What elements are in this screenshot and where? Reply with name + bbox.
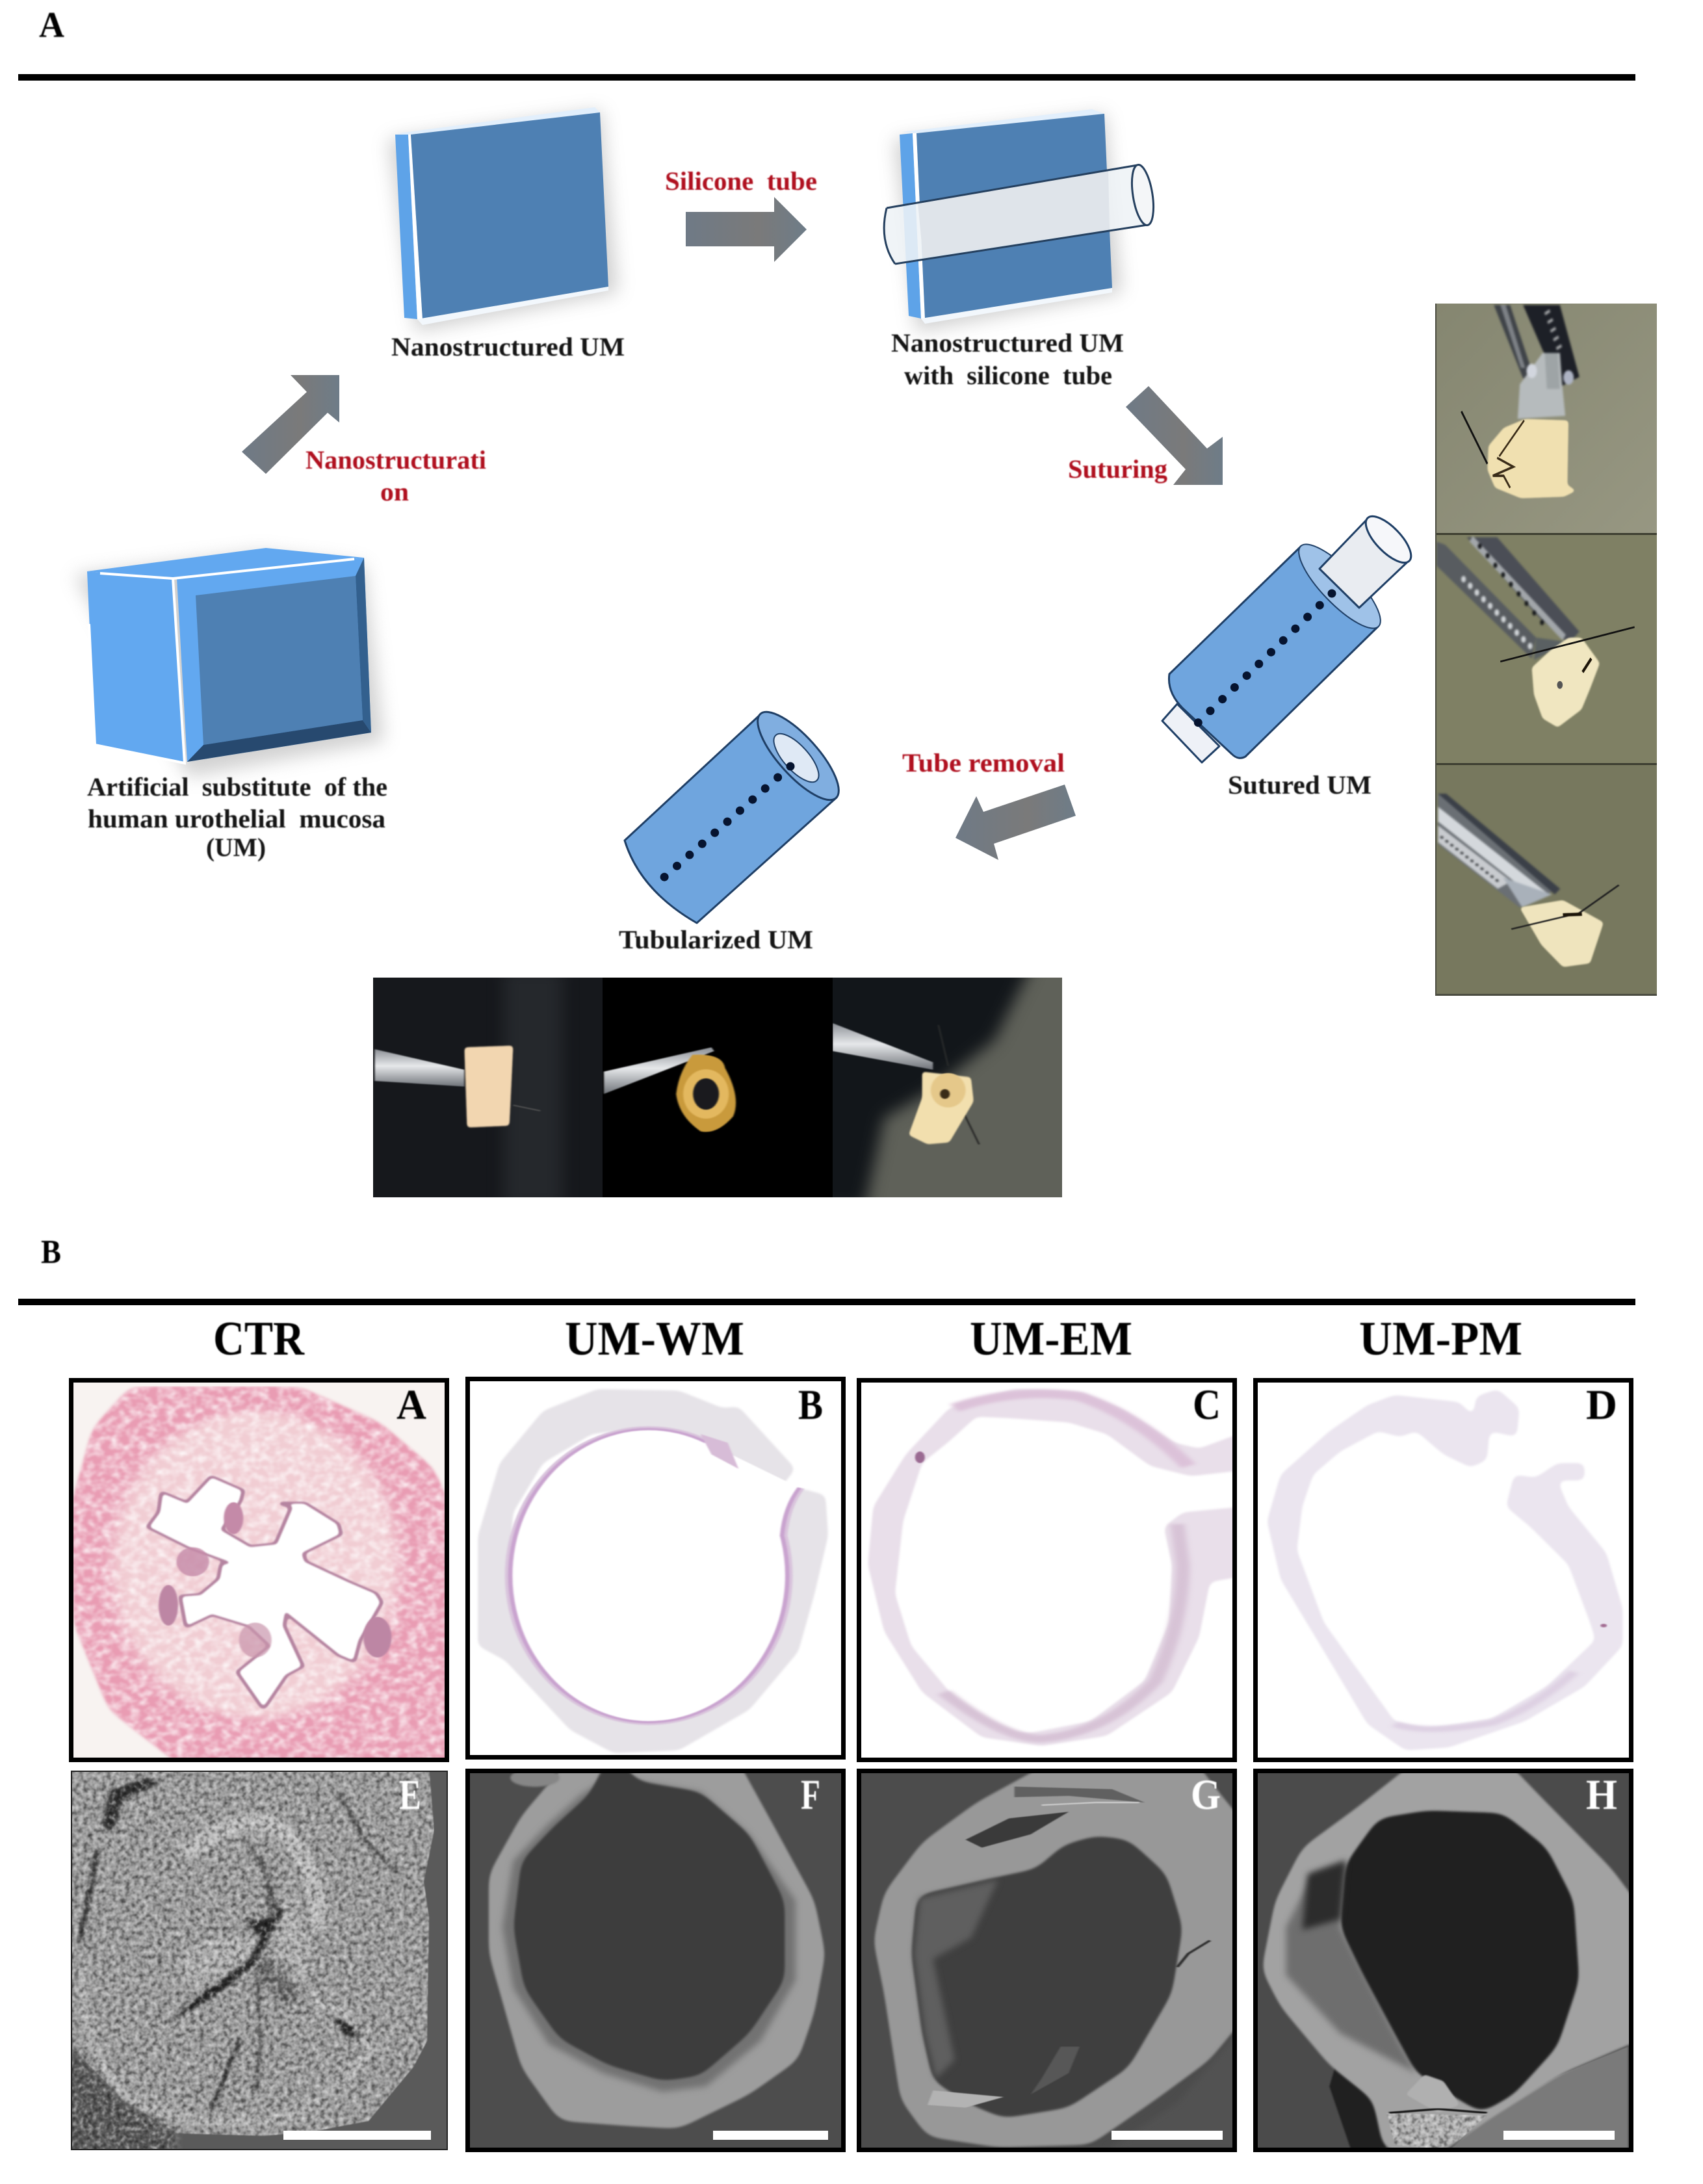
arrow: tube removal xyxy=(956,785,1076,860)
scale bar G xyxy=(1112,2131,1223,2140)
label: sutured UM: Sutured UM xyxy=(1228,770,1372,800)
photo: suturing the tube xyxy=(1435,534,1657,764)
label: nanostructured UM with silicone tube: with silicone tube xyxy=(904,361,1112,390)
arrow: suturing xyxy=(1126,386,1223,485)
step: nanostructured slab xyxy=(389,107,618,332)
panel letter A: A xyxy=(396,1381,426,1429)
photo: tube lumen view xyxy=(603,978,833,1197)
panel F: UM-WM electron micrograph xyxy=(465,1752,846,2152)
label: artificial substitute: human urothelial mucosa xyxy=(88,804,385,833)
section label B: B xyxy=(41,1234,61,1271)
label: nanostructuration: Nanostructurati xyxy=(306,445,486,474)
photo: tube side view xyxy=(373,968,603,1209)
label: artificial substitute xyxy=(87,772,387,862)
arrow: silicone tube xyxy=(686,197,807,262)
column heading: UM-WM: UM-WM xyxy=(565,1312,744,1366)
photo: tube with suture xyxy=(833,978,1062,1197)
panel letter F: F xyxy=(801,1771,820,1819)
column heading: UM-EM: UM-EM xyxy=(970,1312,1132,1366)
photo strip: suturing steps xyxy=(1435,304,1657,996)
section B rule xyxy=(18,1299,1635,1305)
panel E: CTR electron micrograph xyxy=(65,1768,448,2158)
label: nanostructuration: on xyxy=(380,477,409,506)
photo: sutured tube xyxy=(1435,764,1657,995)
photo: forceps holding silicone tube xyxy=(1435,304,1657,534)
photo dividers xyxy=(1435,533,1657,535)
step: tubularized UM xyxy=(625,701,851,923)
label: silicone tube: Silicone tube xyxy=(665,166,817,196)
step: slab with silicone tube xyxy=(884,109,1157,332)
panel B: UM-WM histology xyxy=(465,1377,846,1760)
scale bar H xyxy=(1503,2131,1615,2140)
label: nanostructuration xyxy=(306,445,486,506)
label: tube removal: Tube removal xyxy=(902,748,1065,777)
panel letter G: G xyxy=(1191,1771,1221,1819)
section A rule xyxy=(18,74,1635,81)
panel letter H: H xyxy=(1586,1771,1617,1819)
panel A: CTR histology xyxy=(69,1378,462,1765)
label: nanostructured UM: Nanostructured UM xyxy=(391,332,625,361)
label: artificial substitute: (UM) xyxy=(206,833,266,862)
panel letter B: B xyxy=(798,1381,823,1429)
panel D: UM-PM histology xyxy=(1253,1378,1633,1762)
section label A: A xyxy=(39,5,65,46)
label: nanostructured UM with silicone tube: Nanostructured UM xyxy=(891,328,1124,358)
photo strip: tubularized result xyxy=(373,978,1062,1197)
panel letter D: D xyxy=(1586,1381,1617,1429)
scale bar F xyxy=(713,2131,828,2140)
label: suturing: Suturing xyxy=(1068,454,1167,484)
scale bar E xyxy=(283,2131,431,2140)
column heading: CTR: CTR xyxy=(213,1312,305,1366)
panel H: UM-PM electron micrograph xyxy=(1253,1752,1656,2155)
column heading: UM-PM: UM-PM xyxy=(1359,1312,1522,1366)
label: tubularized UM: Tubularized UM xyxy=(619,925,813,954)
label: artificial substitute: Artificial substitute of the xyxy=(87,772,387,801)
step: sutured tube xyxy=(1162,510,1418,762)
arrow: nanostructuration xyxy=(242,375,339,474)
panel letter C: C xyxy=(1193,1381,1221,1429)
label: nanostructured UM with silicone tube xyxy=(891,328,1124,390)
silicone tube xyxy=(884,163,1157,264)
panel letter E: E xyxy=(399,1771,421,1819)
step: artificial urothelial mucosa block xyxy=(75,548,384,777)
panel G: UM-EM electron micrograph xyxy=(857,1752,1264,2152)
panel C: UM-EM histology xyxy=(857,1378,1243,1762)
